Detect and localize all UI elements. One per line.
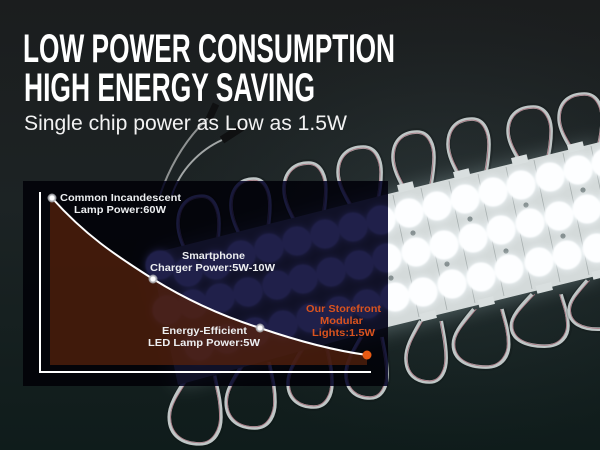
glow around modules xyxy=(150,142,600,385)
label: incandescent lamp: Lamp Power:60W xyxy=(74,204,166,216)
power curve xyxy=(52,198,367,355)
wire loops: top xyxy=(178,93,600,266)
screw holes xyxy=(388,187,586,281)
photo: LED module strip xyxy=(146,93,600,445)
label: storefront modular lights: Our Storefront xyxy=(306,303,382,315)
cable: input wires xyxy=(160,104,242,195)
label: storefront modular lights: Modular xyxy=(320,315,363,327)
module body under panel xyxy=(150,194,388,385)
module connector tabs xyxy=(397,141,600,322)
axes xyxy=(40,192,371,372)
label: LED lamp: Energy-Efficient xyxy=(162,325,248,337)
point: incandescent lamp xyxy=(48,194,56,202)
point: storefront modular lights xyxy=(362,350,372,360)
wire loops: bottom xyxy=(169,280,600,445)
label: storefront modular lights xyxy=(306,303,382,339)
title: LOW POWER CONSUMPTION xyxy=(23,27,395,71)
point: LED lamp xyxy=(256,324,264,332)
subtitle: Single chip power as Low as 1.5W xyxy=(24,112,347,135)
label: storefront modular lights: Lights:1.5W xyxy=(312,327,375,339)
panel: power chart xyxy=(23,181,388,386)
label: incandescent lamp: Common Incandescent xyxy=(60,192,182,204)
label: smartphone charger: Smartphone xyxy=(182,250,245,262)
title: HIGH ENERGY SAVING xyxy=(24,66,315,110)
area under curve xyxy=(50,196,367,365)
label: smartphone charger xyxy=(150,250,275,274)
module dividers xyxy=(393,146,600,317)
title xyxy=(23,27,395,110)
point: smartphone charger xyxy=(150,276,156,282)
label: LED lamp xyxy=(148,325,260,349)
label: incandescent lamp xyxy=(60,192,182,216)
label: LED lamp: LED Lamp Power:5W xyxy=(148,337,260,349)
label: smartphone charger: Charger Power:5W-10W xyxy=(150,262,275,274)
chart backdrop xyxy=(23,181,388,386)
LED bloom xyxy=(146,149,600,360)
module body xyxy=(388,142,600,327)
LED lenses xyxy=(146,149,600,360)
